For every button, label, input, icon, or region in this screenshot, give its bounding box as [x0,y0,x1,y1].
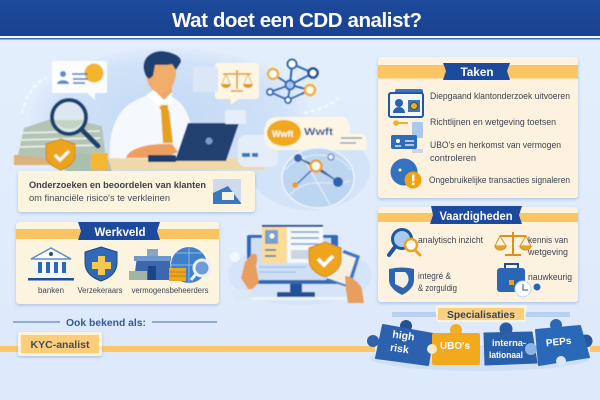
section: Ook bekend als: Ook bekend als: [66,317,146,329]
icon: ID card [389,89,423,117]
task list: Ongebruikelijke transacties signaleren [429,175,570,185]
icon: insurance shield [85,247,117,281]
panel: Taken [378,57,578,198]
task list: Richtlijnen en wetgeving toetsen [430,117,556,127]
speech bubble: profile [52,61,107,100]
panel: Werkveld [16,222,219,304]
heading: Specialisaties: Specialisaties [447,309,515,321]
decorative orange line [0,346,375,352]
header bar with title: Wat doet een CDD analist? [172,9,422,32]
icon: shield check [309,242,341,277]
hero caption [18,171,255,212]
icon: hands [241,254,259,292]
section: Specialisaties [367,305,592,371]
icon: asset managers [129,247,210,283]
icon: network [267,60,318,103]
text: kennis van wetgeving: kennis van [528,235,568,245]
panel: Vaardigheden [378,206,578,302]
text: analytisch inzicht: analytisch inzicht [418,235,483,245]
Wwft bubble [264,117,367,150]
speech bubble: scales [215,63,259,105]
icon: integrity shield [389,268,414,295]
tag: KYC-analist [18,332,102,356]
illustration: compliance check on monitor [228,225,372,305]
icon: briefcase and clock [497,264,540,297]
task list: UBO's en herkomst van vermogen [430,140,561,150]
labels: sectors: Verzekeraars [78,286,122,295]
tag: KYC-analist: KYC-analist [30,339,90,351]
icon: bank [28,248,74,280]
header bar with title [0,0,600,40]
labels: sectors [38,286,208,295]
hero caption: Onderzoeken en beoordelen van klanten [29,180,206,191]
Wwft bubble: Wwft [304,127,334,138]
text: integer en zorgvuldig [418,271,457,293]
text: nauwkeurig: nauwkeurig [528,272,572,282]
labels: sectors: vermogensbeheerders [132,286,208,295]
icon: shield [46,139,75,170]
icon: money stacks and magnifier [18,100,112,172]
decorative document bubbles [193,67,218,92]
heading: Werkveld: Werkveld [94,227,146,239]
puzzle piece: high risk: high [392,329,415,344]
text: kennis van wetgeving [527,235,568,257]
icon: laptop [148,123,239,162]
task list: Diepgaand klantonderzoek uitvoeren [430,91,570,101]
icon: globe with nodes [282,148,354,208]
Wwft bubble: Wwft [272,129,294,139]
text: integer en zorgvuldig: & zorguldig [418,283,457,293]
puzzle piece: high risk [367,320,433,365]
puzzle piece: UBO's: UBO's [440,340,470,352]
puzzle piece: PEPs: PEPs [545,336,572,349]
hero illustration: analyst at laptop [14,48,370,210]
person [110,51,196,160]
labels: sectors: banken [38,286,64,295]
task list [429,91,570,185]
puzzle piece: internationaal: interna- [492,338,526,348]
hero caption: om financiële risico's te verkleinen [29,193,170,203]
heading: Taken [443,63,510,80]
text: integer en zorgvuldig: integré & [418,271,451,281]
icon: document stack [326,250,360,288]
text: kennis van wetgeving: wetgeving [527,247,568,257]
icon: magnifier [389,230,420,255]
puzzle piece: internationaal: lationaal [489,350,523,360]
puzzle piece: PEPs [536,319,592,366]
dotted arc [22,78,338,113]
heading: Taken: Taken [460,67,494,79]
icon: desk [110,158,265,170]
heading: Vaardigheden: Vaardigheden [440,211,512,223]
icon: documents [213,179,241,204]
icon: scales [495,232,531,255]
task list: controleren [430,153,476,163]
heading: Specialisaties [435,305,527,322]
heading: Werkveld [78,222,160,240]
puzzle piece: internationaal [484,322,537,365]
puzzle piece: high risk: risk [389,342,410,356]
icon: key and document [391,120,423,153]
heading: Vaardigheden [430,206,522,224]
icon: alert globe [390,158,422,188]
puzzle piece: UBO's [427,324,480,365]
